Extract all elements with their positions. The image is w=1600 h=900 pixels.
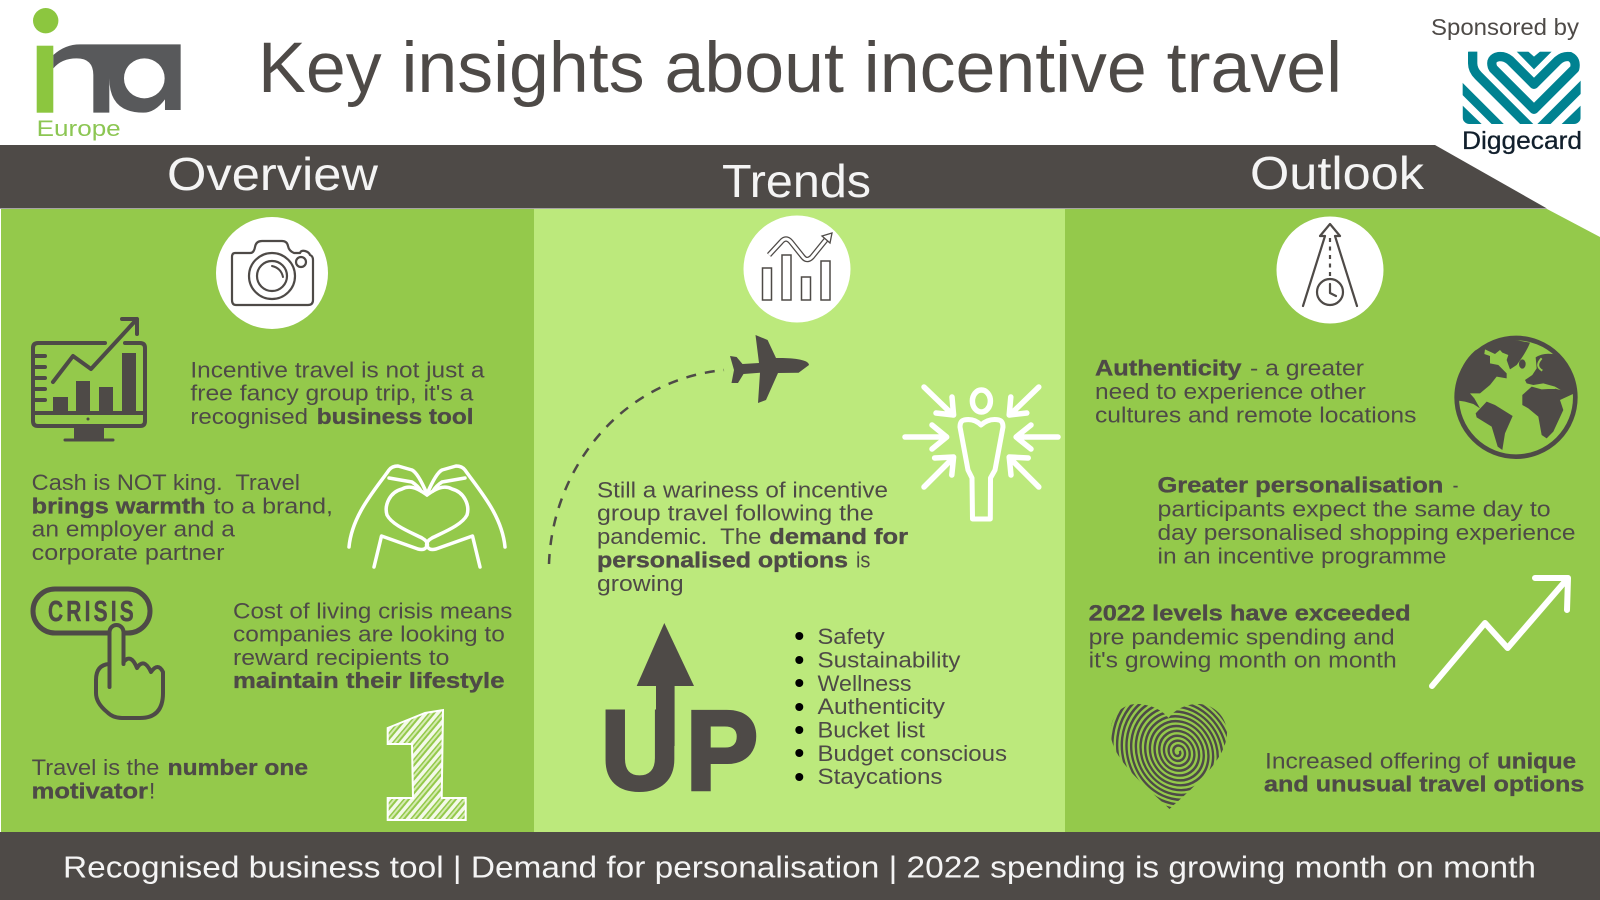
text: cash is not king: Cash is NOT king. Travel	[32, 470, 300, 495]
text: cost of living: maintain their lifestyle	[233, 668, 504, 693]
text: greater personalisation: participants expect the same day to	[1158, 497, 1551, 522]
text: 2022 levels	[1089, 601, 1411, 673]
text: number one motivator: motivator	[32, 778, 148, 803]
text: number one motivator: number one	[168, 755, 308, 780]
list: trend bullets	[795, 624, 1007, 789]
list: trend bullets: Authenticity	[818, 694, 946, 719]
icon: road and clock in circle	[1276, 216, 1384, 324]
text: number one motivator: Travel is the	[32, 755, 159, 780]
panel: outlook	[1065, 209, 1600, 858]
list: trend bullets: Safety	[818, 624, 885, 649]
icon: crisis button with pointing hand	[33, 589, 163, 718]
icon: person with inward arrows	[905, 387, 1058, 519]
text: authenticity: Authenticity	[1095, 356, 1242, 381]
list: trend bullets: Staycations	[818, 764, 942, 789]
icon: sketched number one	[388, 710, 466, 820]
heading: outlook: Outlook	[1250, 147, 1425, 199]
icon: UP with arrow	[601, 623, 758, 813]
icon: UP with arrow: P	[686, 688, 758, 813]
icon: camera in circle	[216, 217, 328, 329]
text: wariness: is	[856, 547, 870, 572]
heading: overview: Overview	[167, 148, 379, 200]
text: business tool: business tool	[317, 404, 474, 429]
text: greater personalisation: in an incentive programme	[1158, 543, 1446, 568]
panel: overview	[1, 209, 534, 832]
icon: monitor with rising chart	[33, 319, 145, 440]
text: authenticity	[1095, 356, 1416, 427]
icon: airplane	[730, 335, 809, 403]
text: number one motivator	[32, 755, 308, 803]
logo: Diggecard	[1462, 52, 1581, 154]
text: cash is not king: to a brand,	[214, 493, 333, 518]
icon: rising arrow	[1432, 578, 1568, 686]
text: business tool	[190, 357, 485, 429]
text: wariness: group travel following the	[597, 501, 874, 526]
text: wariness: pandemic. The	[597, 524, 761, 549]
text: business tool: free fancy group trip, it's a	[190, 381, 474, 406]
icon: hands forming heart	[349, 466, 505, 567]
logo: IMA Europe: Europe	[37, 116, 121, 141]
logo: Diggecard: Diggecard	[1462, 127, 1582, 155]
text: authenticity: - a greater	[1250, 356, 1365, 381]
sponsor label: Sponsored by	[1431, 14, 1580, 40]
text: unique options	[1264, 748, 1584, 797]
text: wariness: Still a wariness of incentive	[597, 477, 888, 502]
text: greater personalisation: -	[1453, 473, 1458, 498]
text: greater personalisation: day personalised shopping experience	[1158, 520, 1576, 545]
text: cash is not king: corporate partner	[32, 540, 225, 565]
text: cost of living: reward recipients to	[233, 645, 449, 670]
list: trend bullets: Budget conscious	[818, 741, 1007, 766]
icon: crisis button with pointing hand: CRISIS	[48, 596, 134, 628]
text: cash is not king	[32, 470, 333, 565]
text: cash is not king: an employer and a	[32, 517, 235, 542]
list: trend bullets: Wellness	[818, 671, 912, 696]
list: trend bullets: Sustainability	[818, 648, 961, 672]
heading: trends: Trends	[722, 155, 871, 207]
footer bar with summary: Recognised business tool | Demand for personalisation | 2022 spending is growing month on month	[63, 850, 1536, 884]
text: cash is not king: brings warmth	[32, 493, 206, 518]
text: 2022 levels: pre pandemic spending and	[1089, 624, 1395, 649]
text: cost of living: Cost of living crisis means	[233, 598, 512, 623]
text: unique options: and unusual travel options	[1264, 772, 1584, 797]
text: authenticity: need to experience other	[1095, 379, 1366, 404]
text: cost of living: companies are looking to	[233, 622, 505, 647]
icon: chart in circle	[744, 216, 850, 322]
logo: IMA Europe	[33, 8, 181, 141]
list: trend bullets: Bucket list	[818, 718, 926, 742]
text: authenticity: cultures and remote locations	[1095, 402, 1416, 427]
text: business tool: Incentive travel is not just a	[190, 357, 485, 382]
title: Key insights about incentive travel	[258, 29, 1342, 108]
text: wariness: personalised options	[597, 547, 848, 572]
icon: UP with arrow: U	[601, 688, 679, 813]
icon: flight path dashes	[549, 370, 724, 564]
text: greater personalisation: Greater personalisation	[1158, 473, 1443, 498]
text: 2022 levels: it's growing month on month	[1089, 648, 1397, 673]
icon: fingerprint heart	[1110, 704, 1227, 809]
text: wariness	[597, 477, 908, 596]
text: business tool: recognised	[190, 404, 308, 429]
header bar with column headings	[0, 145, 1547, 208]
text: wariness: growing	[597, 571, 684, 596]
footer bar with summary	[0, 832, 1600, 900]
text: greater personalisation	[1158, 473, 1576, 568]
text: unique options: unique	[1497, 748, 1576, 773]
icon: globe	[1457, 338, 1575, 457]
text: wariness: demand for	[769, 524, 908, 549]
text: 2022 levels: 2022 levels have exceeded	[1089, 601, 1411, 626]
panel: trends	[534, 209, 1065, 832]
text: unique options: Increased offering of	[1265, 748, 1490, 773]
text: number one motivator: !	[149, 778, 155, 803]
text: cost of living	[233, 598, 512, 693]
